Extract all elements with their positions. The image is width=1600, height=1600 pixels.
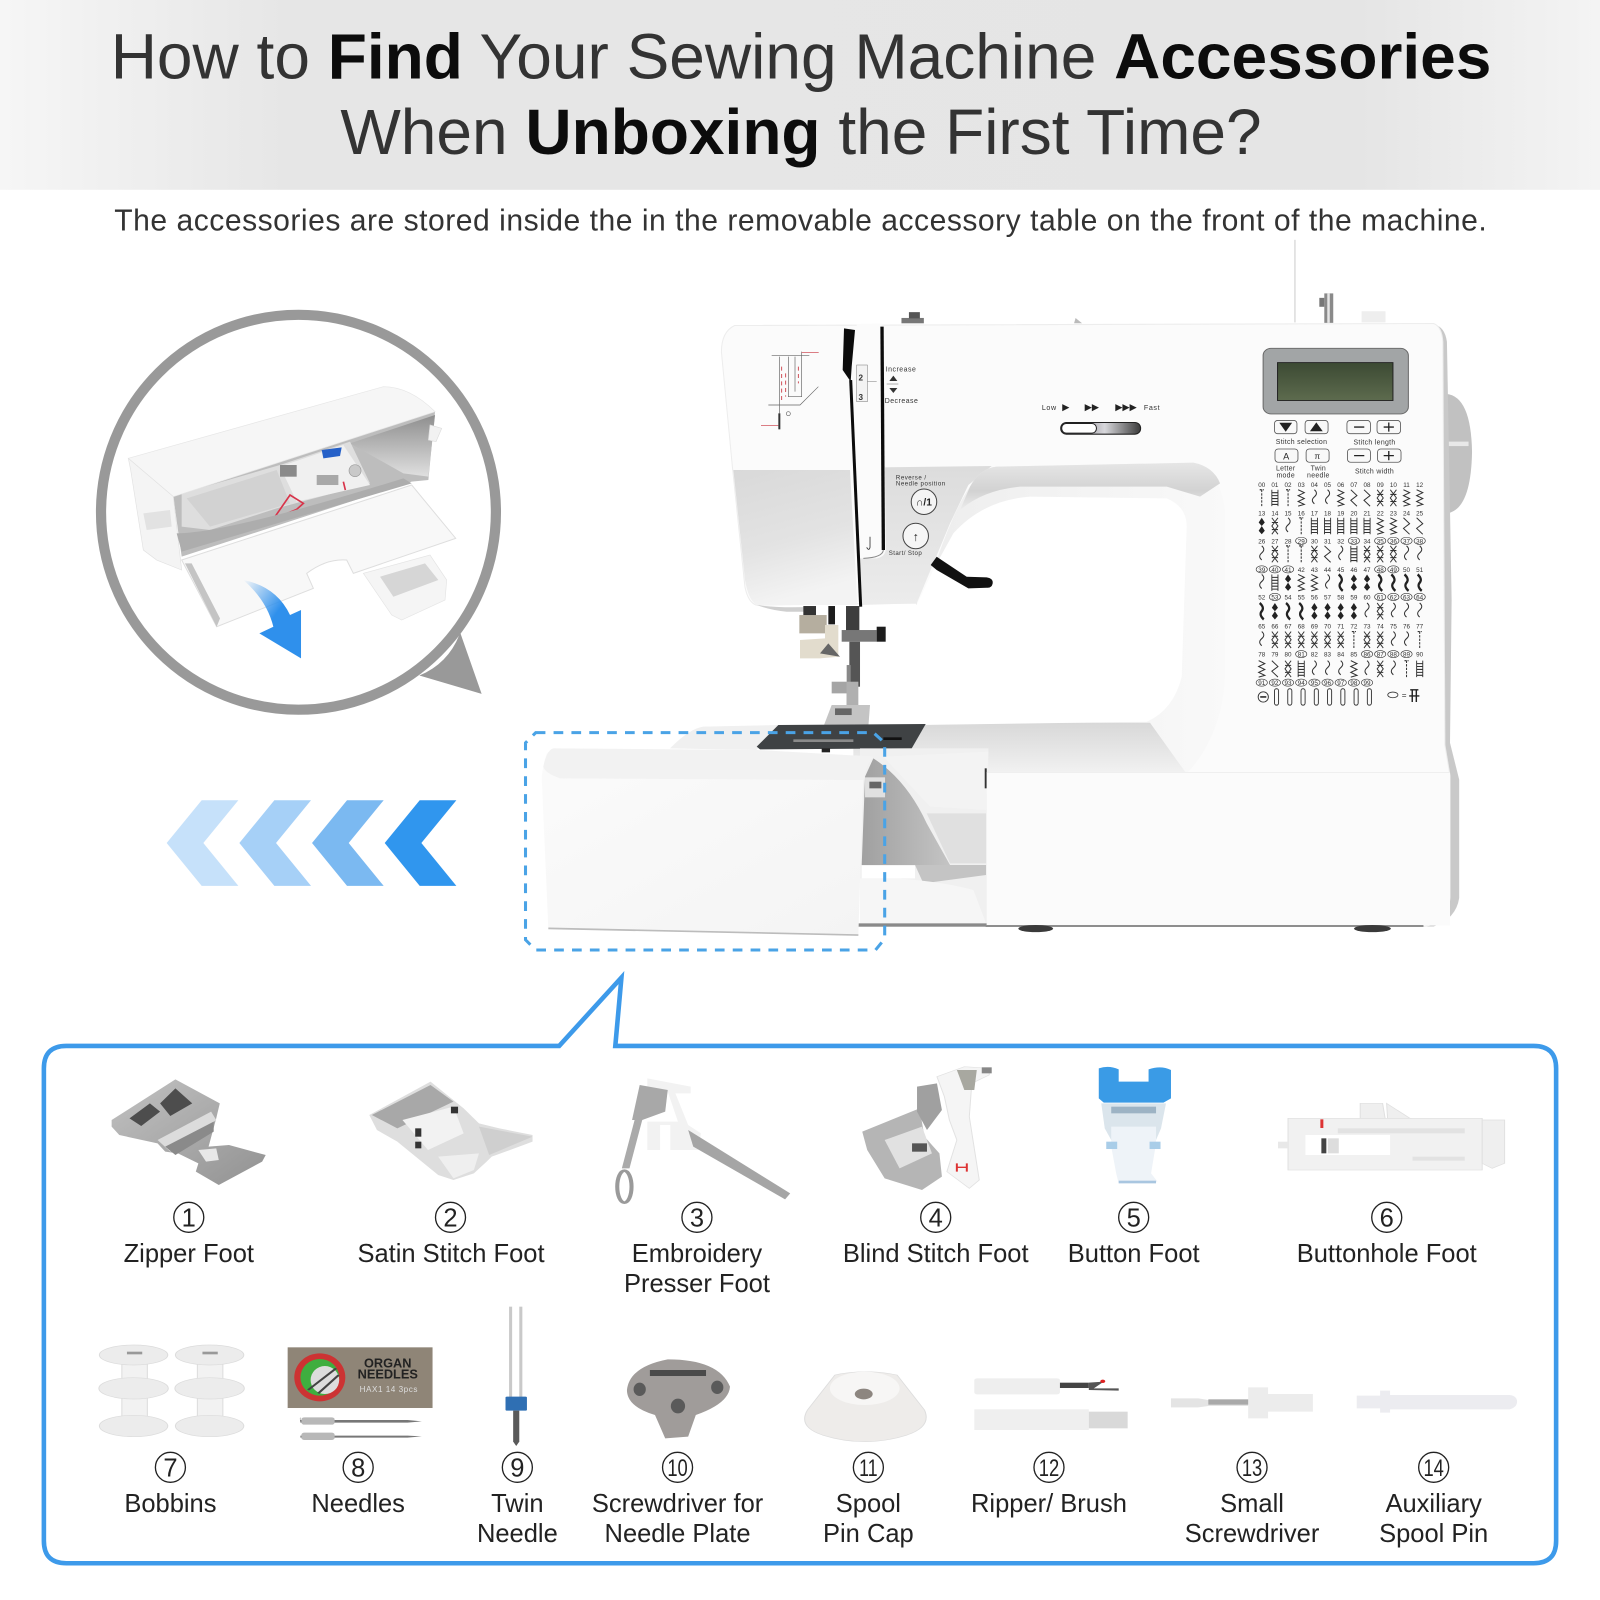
stitch numbers: 44	[1324, 567, 1332, 574]
item: needles	[288, 1347, 433, 1518]
title: When Unboxing the First Time?	[340, 96, 1262, 168]
item: button foot: Button Foot	[1068, 1240, 1200, 1268]
stitch numbers: 05	[1324, 482, 1332, 489]
stitch numbers: 51	[1416, 567, 1424, 574]
stitch numbers: 42	[1298, 567, 1305, 574]
reverse and start buttons: Reverse /	[896, 475, 927, 482]
tension labels: Increase	[886, 366, 916, 373]
stitch numbers: 67	[1285, 624, 1292, 631]
header banner	[0, 0, 1600, 190]
stitch numbers: 16	[1298, 510, 1305, 517]
stitch numbers: 41	[1285, 567, 1292, 574]
stitch numbers: 49	[1390, 567, 1397, 574]
stitch numbers: 56	[1311, 594, 1318, 601]
item: screwdriver for needle plate: Needle Plate	[605, 1520, 751, 1548]
stitch numbers: 04	[1311, 482, 1318, 489]
sewing machine illustration	[542, 240, 1472, 935]
LCD display	[1263, 348, 1408, 414]
item: button foot	[1068, 1067, 1200, 1268]
stitch numbers: 72	[1350, 624, 1358, 631]
subtitle text: The accessories are stored inside the in the removable accessory table on the front of the machine.	[114, 205, 1487, 238]
control buttons and labels: π	[1315, 452, 1321, 461]
item: small screwdriver: Small	[1220, 1490, 1284, 1518]
bed and accessory table	[542, 724, 988, 935]
tension labels	[858, 366, 918, 405]
item: spool pin cap: Spool	[836, 1490, 901, 1518]
control buttons and labels: Stitch length	[1353, 439, 1396, 446]
item: screwdriver for needle plate: 10	[667, 1455, 688, 1482]
stitch numbers: 02	[1285, 482, 1292, 489]
item: screwdriver for needle plate	[592, 1359, 764, 1548]
stitch numbers: 79	[1271, 652, 1279, 659]
item: needles: NEEDLES	[358, 1367, 418, 1382]
item: blind stitch foot: 4	[929, 1205, 943, 1233]
stitch numbers: 29	[1298, 538, 1305, 545]
stitch numbers: 26	[1258, 538, 1266, 545]
stitch numbers: 55	[1298, 594, 1305, 601]
throat opening	[757, 497, 1187, 725]
presser foot assembly	[757, 605, 886, 727]
stitch numbers: 38	[1416, 538, 1424, 545]
stitch numbers: 28	[1285, 538, 1292, 545]
stitch numbers: 83	[1324, 652, 1332, 659]
control buttons and labels: needle	[1307, 473, 1330, 480]
stitch numbers: 59	[1350, 594, 1358, 601]
stitch numbers: 70	[1324, 624, 1332, 631]
stitch numbers: 76	[1403, 624, 1411, 631]
item: auxiliary spool pin: Auxiliary	[1385, 1490, 1482, 1518]
stitch numbers: 46	[1350, 567, 1358, 574]
stitch number rings	[1256, 537, 1425, 686]
control buttons and labels: Stitch selection	[1276, 439, 1327, 446]
reverse and start buttons: Start/ Stop	[889, 550, 922, 557]
right side strip	[1418, 324, 1459, 927]
control buttons and labels: Twin	[1311, 465, 1326, 472]
stitch numbers: 64	[1416, 594, 1424, 601]
lower head shading	[733, 470, 857, 605]
item: satin stitch foot: Satin Stitch Foot	[357, 1240, 545, 1268]
item: buttonhole foot	[1278, 1103, 1505, 1268]
item: bobbins	[99, 1345, 244, 1518]
stitch numbers: 40	[1271, 567, 1279, 574]
item: twin needle: Twin	[491, 1490, 544, 1518]
item: spool pin cap	[805, 1372, 926, 1548]
item: button foot: 5	[1127, 1205, 1141, 1233]
stitch numbers: 35	[1377, 538, 1384, 545]
speed labels: Fast	[1144, 404, 1160, 412]
stitch numbers: 66	[1271, 624, 1279, 631]
stitch numbers: 69	[1311, 624, 1318, 631]
item: blind stitch foot: Blind Stitch Foot	[843, 1240, 1029, 1268]
item: auxiliary spool pin: 14	[1423, 1455, 1444, 1482]
title: How to Find Your Sewing Machine Accessories	[111, 21, 1491, 93]
stitch numbers: 68	[1298, 624, 1305, 631]
control buttons and labels: Letter	[1276, 465, 1296, 472]
machine body	[721, 323, 1450, 927]
stitch numbers: 99	[1364, 680, 1371, 687]
spool pin and top fittings	[901, 240, 1385, 323]
item: bobbins: Bobbins	[124, 1490, 216, 1518]
stitch numbers: 13	[1258, 510, 1266, 517]
stitch numbers: 87	[1377, 652, 1384, 659]
speed labels	[1042, 404, 1160, 412]
stitch numbers: 65	[1258, 624, 1266, 631]
stitch numbers: 81	[1298, 652, 1305, 659]
stitch numbers: 58	[1337, 594, 1345, 601]
arrows: four blue chevrons	[167, 800, 456, 886]
dashed highlight box around accessory table	[526, 733, 885, 950]
stitch numbers: 19	[1337, 510, 1345, 517]
callout: zoomed accessory box	[101, 315, 496, 710]
item: small screwdriver: 13	[1242, 1455, 1262, 1482]
item: spool pin cap: Pin Cap	[823, 1520, 914, 1548]
item: needles: 8	[351, 1455, 365, 1483]
item: embroidery presser foot	[617, 1078, 790, 1298]
item: ripper and brush	[971, 1378, 1128, 1518]
stitch numbers: 22	[1377, 510, 1384, 517]
stitch numbers: 12	[1416, 482, 1424, 489]
item: ripper and brush: Ripper/ Brush	[971, 1490, 1127, 1518]
item: bobbins: 7	[163, 1455, 178, 1483]
arm bevel	[887, 463, 1225, 773]
stitch numbers: 54	[1285, 594, 1292, 601]
stitch numbers: 90	[1416, 652, 1424, 659]
stitch numbers: 53	[1271, 594, 1279, 601]
item: embroidery presser foot: Embroidery	[632, 1240, 762, 1268]
stitch numbers: 88	[1390, 652, 1397, 659]
stitch numbers: 43	[1311, 567, 1318, 574]
reverse and start buttons: Needle position	[896, 481, 946, 488]
item: auxiliary spool pin: Spool Pin	[1379, 1520, 1488, 1548]
stitch numbers: 97	[1337, 680, 1345, 687]
stitch numbers: 75	[1390, 624, 1397, 631]
stitch numbers: 08	[1364, 482, 1371, 489]
stitch numbers: 03	[1298, 482, 1305, 489]
stitch numbers: 93	[1285, 680, 1292, 687]
stitch numbers: 14	[1271, 510, 1279, 517]
stitch numbers: 32	[1337, 538, 1345, 545]
stitch numbers: 34	[1364, 538, 1371, 545]
accessory table	[542, 748, 873, 935]
stitch numbers: 52	[1258, 594, 1266, 601]
stitch numbers: 95	[1311, 680, 1318, 687]
stitch numbers: 17	[1311, 510, 1318, 517]
control buttons and labels: mode	[1276, 473, 1295, 480]
stitch numbers: 50	[1403, 567, 1411, 574]
stitch numbers: 60	[1364, 594, 1371, 601]
speed labels: Low	[1042, 404, 1057, 412]
stitch numbers: 73	[1364, 624, 1371, 631]
item: auxiliary spool pin	[1357, 1391, 1517, 1548]
tension labels: Decrease	[885, 398, 918, 405]
stitch numbers	[1258, 482, 1424, 687]
control buttons and labels	[1274, 420, 1401, 480]
title	[111, 21, 1491, 168]
stitch numbers: 39	[1258, 567, 1266, 574]
gap behind accessory table	[858, 748, 988, 927]
item: needles: ORGAN	[364, 1355, 411, 1370]
tension arrows	[889, 376, 897, 393]
item: twin needle: Needle	[477, 1520, 558, 1548]
panel: accessories list	[44, 978, 1556, 1563]
needle threader lever	[931, 557, 993, 588]
item: buttonhole foot: Buttonhole Foot	[1297, 1240, 1477, 1268]
stitch numbers: 09	[1377, 482, 1384, 489]
item: zipper foot: Zipper Foot	[124, 1240, 254, 1268]
stitch numbers: 91	[1258, 680, 1266, 687]
stitch numbers: 61	[1377, 594, 1384, 601]
stitch numbers: 23	[1390, 510, 1397, 517]
stitch glyphs: =	[1402, 691, 1407, 700]
item: spool pin cap: 11	[859, 1455, 878, 1482]
base front and feet	[986, 772, 1450, 932]
item: needles: HAX1 14 3pcs	[360, 1385, 418, 1394]
item: satin stitch foot: 2	[443, 1205, 458, 1233]
stitch numbers: 48	[1377, 567, 1384, 574]
stitch numbers: 33	[1350, 538, 1358, 545]
tension labels: 3	[858, 393, 863, 402]
control buttons and labels: A	[1283, 452, 1290, 462]
item: small screwdriver: Screwdriver	[1185, 1520, 1320, 1548]
item: buttonhole foot: 6	[1380, 1205, 1394, 1233]
stitch numbers: 25	[1416, 510, 1424, 517]
stitch numbers: 89	[1403, 652, 1411, 659]
stitch numbers: 06	[1337, 482, 1345, 489]
stitch pattern chart	[1256, 482, 1425, 705]
stitch numbers: 01	[1271, 482, 1279, 489]
icon: threading diagram	[761, 352, 819, 429]
item: zipper foot	[112, 1079, 266, 1268]
stitch numbers: 84	[1337, 652, 1345, 659]
item: needles: Needles	[311, 1490, 405, 1518]
item: blind stitch foot	[843, 1067, 1029, 1268]
stitch numbers: 74	[1377, 624, 1384, 631]
stitch numbers: 94	[1298, 680, 1305, 687]
stitch numbers: 78	[1258, 652, 1266, 659]
stitch numbers: 10	[1390, 482, 1397, 489]
stitch glyphs	[1258, 490, 1423, 705]
stitch numbers: 45	[1337, 567, 1345, 574]
stitch numbers: 15	[1285, 510, 1292, 517]
stitch numbers: 96	[1324, 680, 1332, 687]
item: twin needle: 9	[510, 1455, 524, 1483]
item: embroidery presser foot: Presser Foot	[624, 1270, 770, 1298]
stitch numbers: 57	[1324, 594, 1332, 601]
reverse and start buttons	[889, 475, 946, 557]
item: embroidery presser foot: 3	[690, 1205, 704, 1233]
stitch numbers: 36	[1390, 538, 1397, 545]
stitch numbers: 80	[1285, 652, 1292, 659]
stitch numbers: 71	[1337, 624, 1345, 631]
stitch numbers: 37	[1403, 538, 1411, 545]
stitch numbers: 31	[1324, 538, 1332, 545]
tension labels: 2	[858, 374, 863, 383]
stitch numbers: 11	[1403, 482, 1410, 489]
stitch numbers: 86	[1364, 652, 1371, 659]
speed slider	[1061, 422, 1141, 434]
needle plate	[757, 724, 926, 749]
item: small screwdriver	[1171, 1387, 1320, 1548]
icon: blue pull arrow	[243, 580, 301, 658]
stitch numbers: 00	[1258, 482, 1266, 489]
handwheel	[1446, 394, 1472, 513]
stitch numbers: 98	[1350, 680, 1358, 687]
bed under arm	[853, 723, 1187, 774]
stitch numbers: 77	[1416, 624, 1424, 631]
stitch numbers: 20	[1350, 510, 1358, 517]
stitch numbers: 63	[1403, 594, 1411, 601]
stitch numbers: 24	[1403, 510, 1411, 517]
stitch numbers: 47	[1364, 567, 1371, 574]
stitch numbers: 85	[1350, 652, 1358, 659]
item: ripper and brush: 12	[1039, 1455, 1059, 1482]
stitch numbers: 18	[1324, 510, 1332, 517]
stitch numbers: 07	[1350, 482, 1358, 489]
stitch numbers: 30	[1311, 538, 1318, 545]
stitch numbers: 27	[1271, 538, 1279, 545]
item: satin stitch foot	[357, 1082, 545, 1268]
control buttons and labels: Stitch width	[1355, 468, 1394, 475]
reverse and start buttons: ↑	[913, 530, 919, 544]
neck shading	[858, 466, 992, 605]
bed left of needle plate	[670, 725, 778, 750]
stitch numbers: 92	[1271, 680, 1279, 687]
reverse and start buttons: ∩/1	[916, 498, 932, 509]
stitch numbers: 82	[1311, 652, 1318, 659]
thread channel panel	[843, 323, 886, 607]
item: zipper foot: 1	[182, 1205, 196, 1233]
stitch numbers: 62	[1390, 594, 1397, 601]
item: twin needle	[477, 1307, 558, 1548]
item: screwdriver for needle plate: Screwdriver for	[592, 1490, 764, 1518]
stitch numbers: 21	[1364, 510, 1371, 517]
